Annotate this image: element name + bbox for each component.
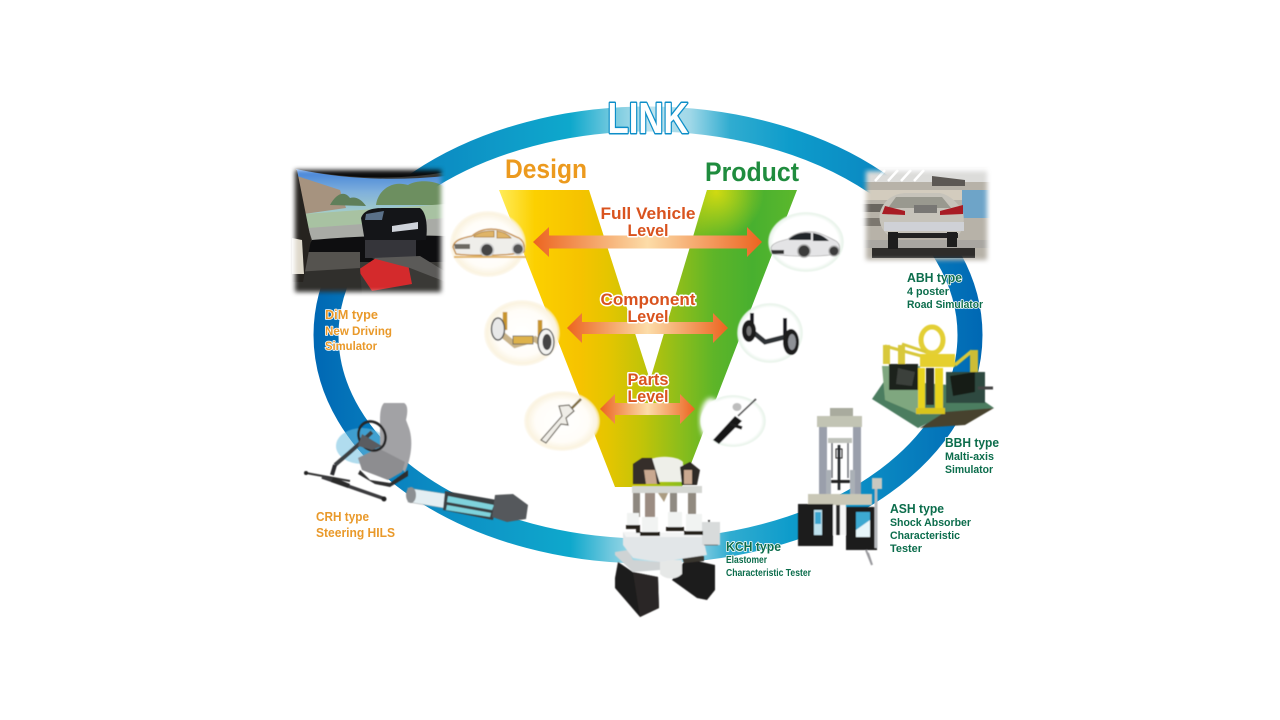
label: ABH type: Road Simulator xyxy=(907,299,984,311)
LINK title: LINK xyxy=(608,94,689,143)
V diagram xyxy=(499,190,797,487)
label: full vehicle level: Full Vehicle xyxy=(600,204,696,223)
label: KCH type: Characteristic Tester xyxy=(726,567,811,579)
label: ASH type: Characteristic xyxy=(890,530,960,542)
label: parts level: Parts xyxy=(628,370,668,389)
circle: product full vehicle xyxy=(768,212,844,272)
label: component level: Component xyxy=(600,290,696,309)
heading: Product: Product xyxy=(705,157,799,187)
machine: CRH steering HILS seat and rack xyxy=(304,403,528,522)
label: BBH type: BBH type xyxy=(945,435,999,450)
label: parts level: Level xyxy=(628,387,668,406)
LINK ring xyxy=(326,119,970,551)
label: full vehicle level: Level xyxy=(628,221,668,240)
label: BBH type: Simulator xyxy=(945,464,994,476)
circle: product parts xyxy=(700,395,766,447)
label: ASH type: Tester xyxy=(890,543,923,555)
label: CRH type: CRH type xyxy=(316,509,369,524)
machine: KCH elastomer tester xyxy=(615,457,720,617)
label: ABH type: ABH type xyxy=(907,270,962,285)
circle: product component xyxy=(737,303,803,363)
label: DiM type: Simulator xyxy=(325,339,377,353)
label: ASH type: ASH type xyxy=(890,501,944,516)
arrow: component xyxy=(567,313,728,343)
label: BBH type: Malti-axis xyxy=(945,451,994,463)
arrow: full vehicle xyxy=(533,227,762,257)
label: KCH type: KCH type xyxy=(726,539,781,554)
photo: ABH car on road simulator xyxy=(860,165,995,265)
label: DiM type: DiM type xyxy=(325,307,378,322)
arrow: parts xyxy=(600,394,695,424)
label: component level: Level xyxy=(628,307,668,326)
machine: ASH shock absorber tester xyxy=(798,408,882,565)
label: ASH type: Shock Absorber xyxy=(890,517,972,529)
circle: design full vehicle xyxy=(450,211,526,277)
label: KCH type: Elastomer xyxy=(726,554,767,566)
label: DiM type: New Driving xyxy=(325,324,392,338)
circle: design component xyxy=(484,300,560,366)
photo: driving simulator xyxy=(290,165,446,297)
machine: BBH multi-axis simulator xyxy=(872,327,994,428)
label: ABH type: 4 poster xyxy=(907,286,950,298)
circle: design parts xyxy=(524,391,600,451)
heading: Design: Design xyxy=(505,154,587,184)
label: CRH type: Steering HILS xyxy=(316,525,395,540)
